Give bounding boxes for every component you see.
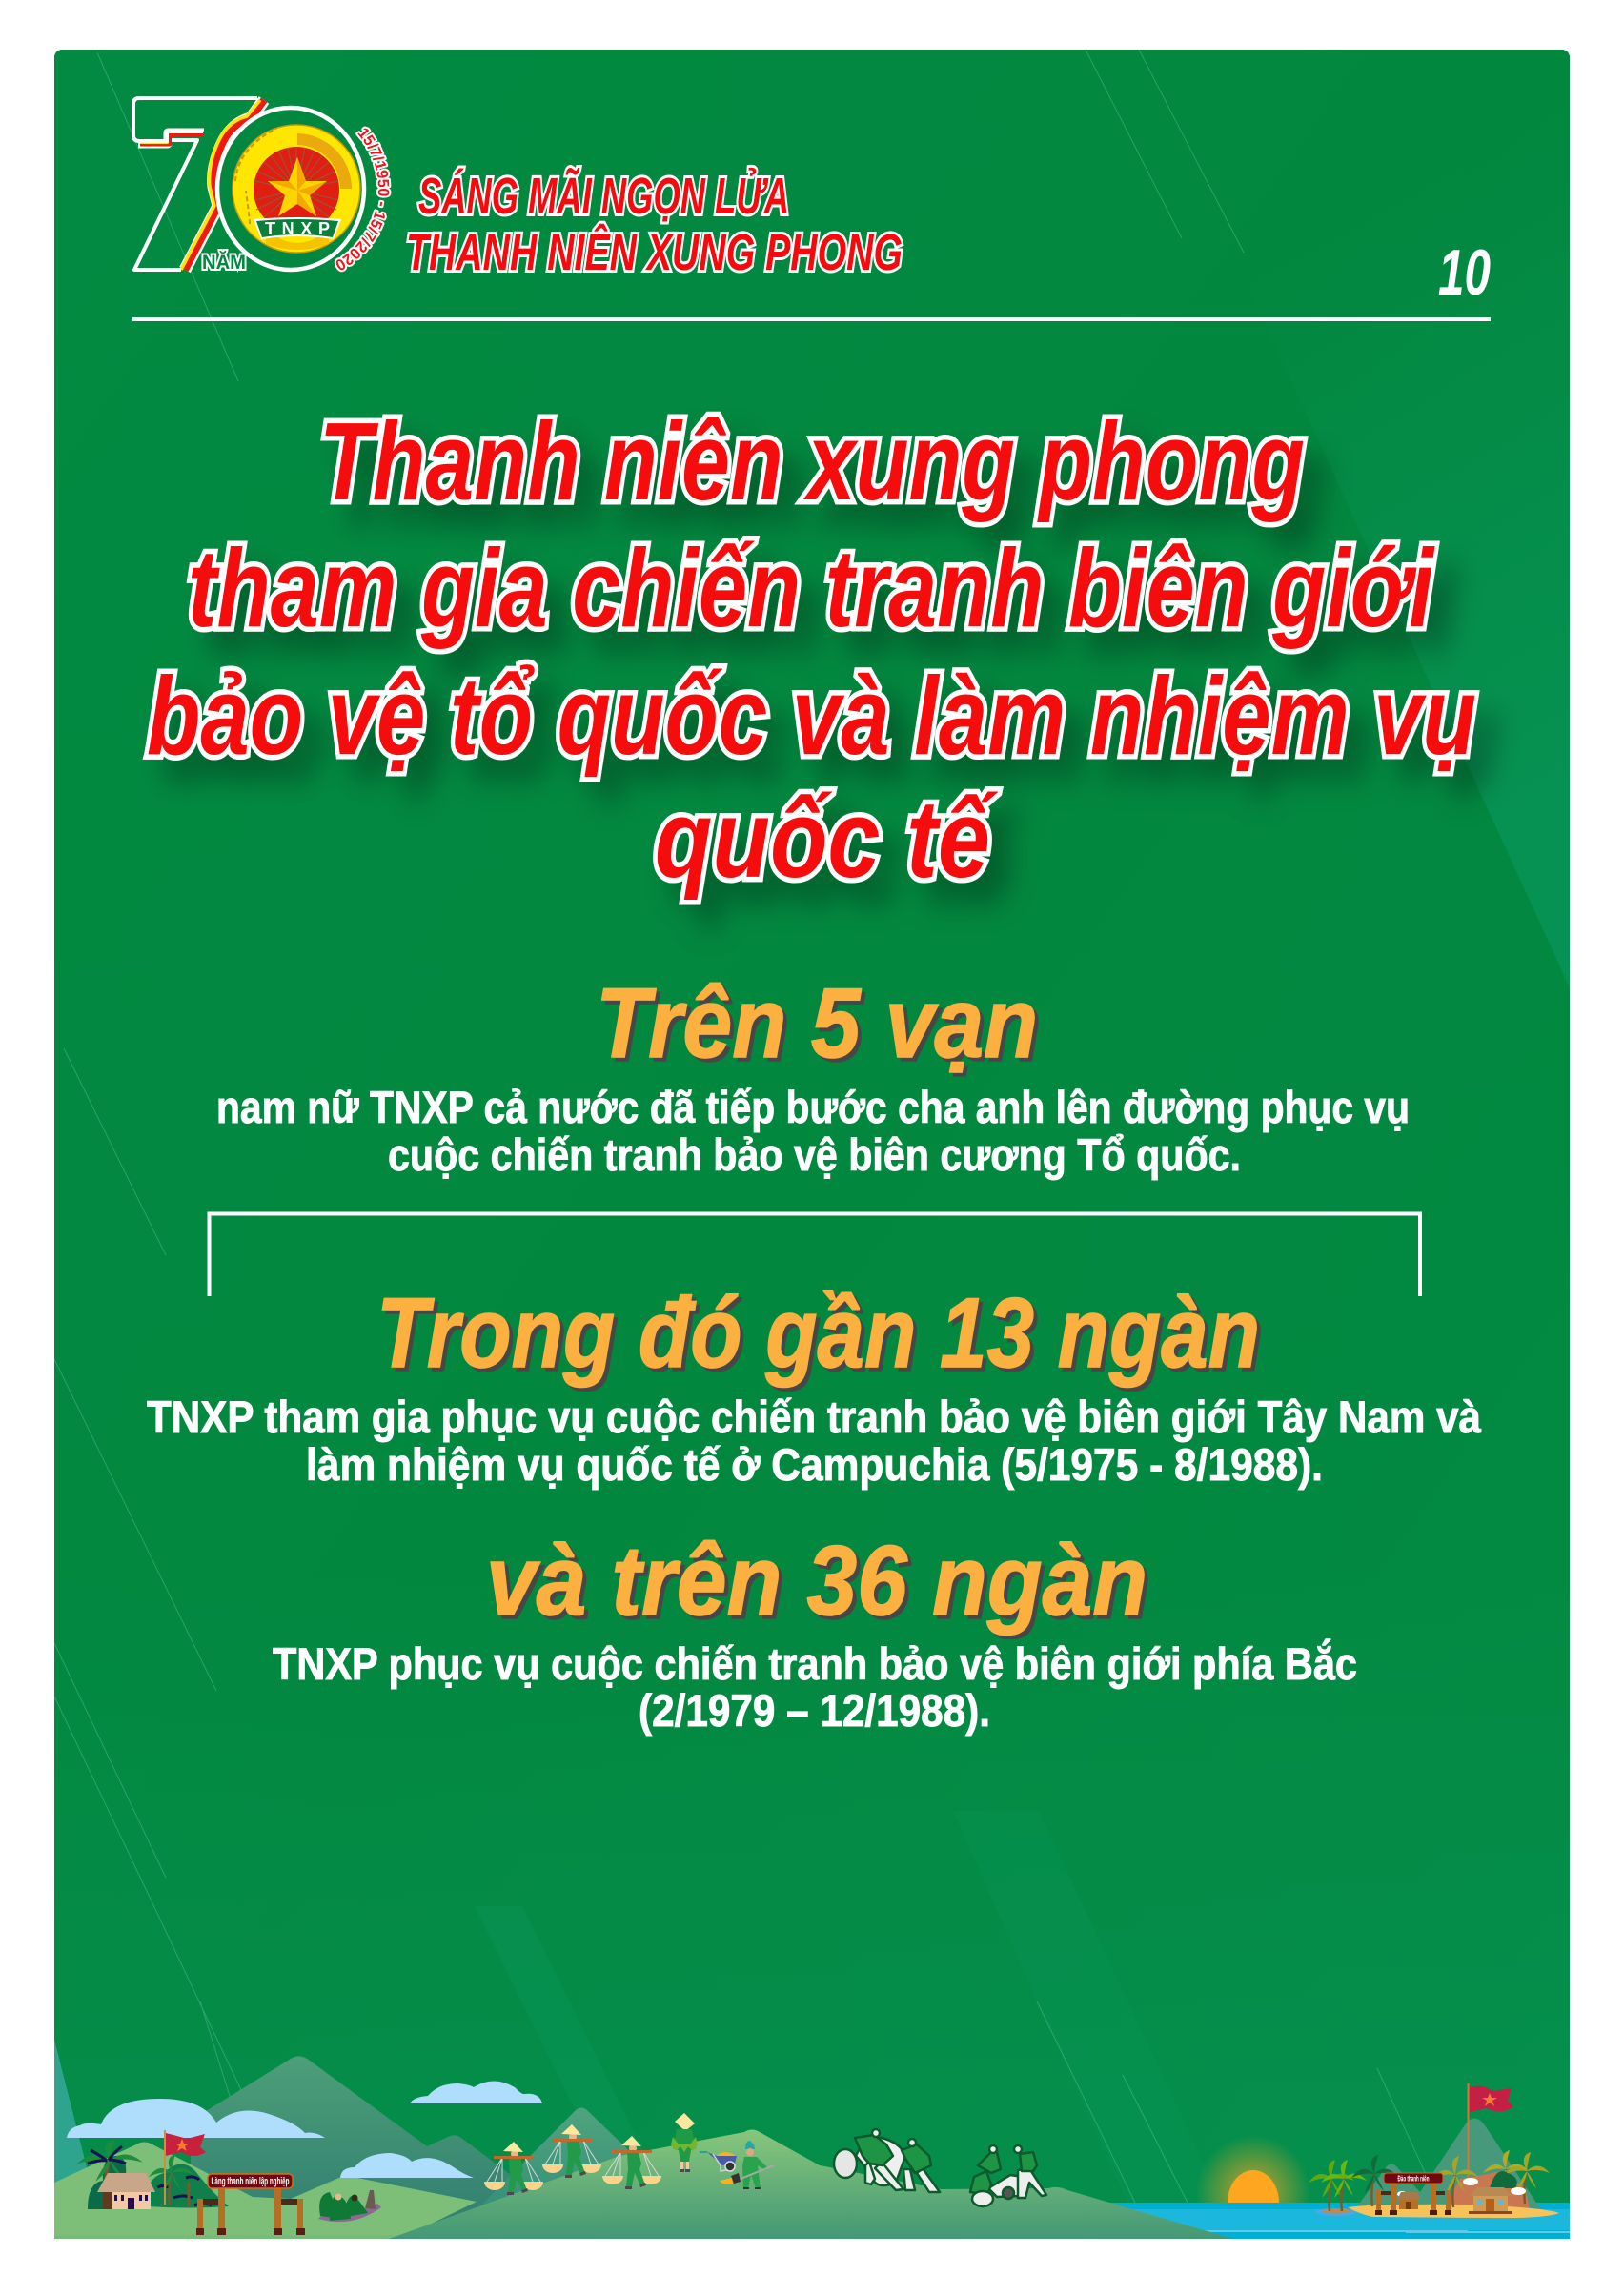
island gate — [1375, 2173, 1451, 2215]
wheelbarrow — [700, 2151, 737, 2171]
cloud top — [410, 2082, 542, 2103]
flag left — [164, 2130, 206, 2205]
sun — [1199, 2137, 1308, 2203]
stat text: 36 ngàn description — [273, 1638, 1357, 1736]
island palms — [1351, 2150, 1550, 2207]
date arc text — [324, 133, 378, 267]
title — [147, 399, 1476, 901]
stat text: 13 ngàn description: TNXP tham gia phục vụ cuộc chiến tranh bảo vệ biên giới Tây Nam và — [147, 1392, 1482, 1442]
header slogan — [406, 168, 903, 281]
ring — [217, 108, 364, 270]
porter 2 — [542, 2124, 601, 2178]
7 numeral with stripes — [133, 98, 264, 270]
stat text: 13 ngàn description: làm nhiệm vụ quốc tế ở Campuchia (5/1975 - 8/1988). — [306, 1439, 1323, 1490]
header slogan: THANH NIÊN XUNG PHONG — [406, 223, 903, 281]
stat text: 36 ngàn description: TNXP phục vụ cuộc chiến tranh bảo vệ biên giới phía Bắc — [273, 1638, 1357, 1689]
stat: trên 5 vạn: Trên 5 vạn — [596, 968, 1038, 1079]
island hut small — [1397, 2192, 1421, 2209]
title: quốc tế — [655, 777, 998, 901]
island flag — [1468, 2083, 1513, 2179]
TNXP emblem: TNXP — [265, 219, 330, 238]
porter 1 — [484, 2142, 543, 2195]
TNXP emblem — [233, 125, 360, 253]
rocks — [1444, 2171, 1530, 2208]
island hut large — [1469, 2187, 1512, 2214]
stat text: 36 ngàn description: (2/1979 – 12/1988). — [639, 1685, 990, 1736]
left green hills — [54, 2143, 477, 2239]
title: Thanh niên xung phong — [319, 399, 1305, 523]
header logo: 70 years emblem — [132, 96, 391, 274]
small island — [1309, 2160, 1367, 2216]
stat text: 13 ngàn description — [147, 1392, 1482, 1490]
clouds — [67, 2082, 542, 2178]
stat: 36 ngàn: và trên 36 ngàn — [486, 1526, 1147, 1636]
group of youth — [318, 2190, 381, 2222]
cloud lower — [340, 2153, 474, 2178]
island gate: Đảo thanh niên — [1397, 2175, 1430, 2183]
woman — [671, 2113, 698, 2172]
bracket — [210, 1214, 1420, 1296]
right green hill — [389, 2129, 1233, 2239]
porter 3 — [602, 2136, 661, 2189]
shoveler — [720, 2141, 774, 2189]
header slogan: SÁNG MÃI NGỌN LỬA — [418, 168, 789, 225]
motorbike riders group 2 — [970, 2145, 1046, 2206]
header logo: 70 years emblem: 15/7/1950 - 15/7/2020 — [334, 126, 391, 273]
house — [97, 2173, 155, 2209]
stat: gần 13 ngàn: Trong đó gần 13 ngàn — [376, 1278, 1260, 1389]
stat text: 5 vạn description — [216, 1082, 1410, 1180]
header divider — [132, 317, 1491, 321]
island mountains — [1357, 2118, 1540, 2208]
gate: village: Làng thanh niên lập nghiệp — [212, 2176, 290, 2187]
page number: 10 — [1438, 236, 1491, 309]
left village trees — [76, 2140, 229, 2209]
gate: village — [196, 2174, 305, 2235]
clouds on island — [1397, 2178, 1526, 2197]
landscape illustration — [54, 2056, 1570, 2249]
big mountains — [191, 2056, 510, 2224]
motorbike riders group 1 — [834, 2129, 940, 2192]
island sand — [1348, 2205, 1559, 2218]
stat text: 5 vạn description: cuộc chiến tranh bảo vệ biên cương Tổ quốc. — [388, 1129, 1241, 1180]
sea — [1109, 2203, 1570, 2239]
NĂM label: NĂM — [202, 252, 246, 274]
mountain: far teal — [54, 2040, 87, 2183]
stat text: 5 vạn description: nam nữ TNXP cả nước đã tiếp bước cha anh lên đường phục vụ — [216, 1082, 1410, 1132]
teal mountain behind porters — [481, 2108, 629, 2205]
cloud left — [67, 2099, 325, 2138]
